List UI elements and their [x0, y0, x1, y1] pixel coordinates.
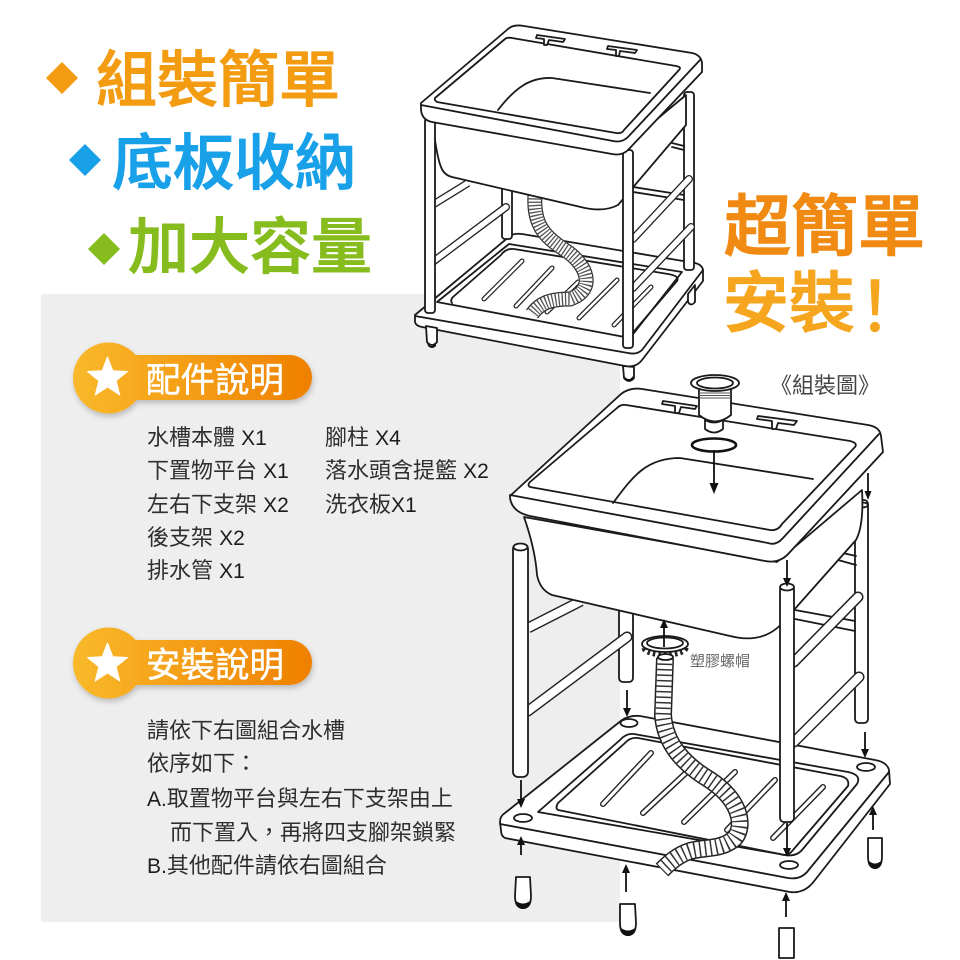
icon: star [88, 357, 128, 395]
installation instructions [147, 718, 456, 878]
gray background panel [41, 294, 620, 922]
icon: star [88, 643, 128, 681]
parts list: 排水管 X1 [147, 558, 245, 583]
drain hose [662, 658, 740, 870]
illustration: assembled sink [415, 25, 703, 382]
plastic nut [642, 636, 688, 660]
platform [415, 234, 703, 366]
slogan: super easy install: 超簡單 [724, 190, 925, 265]
rubber ring [692, 438, 736, 452]
back legs and rails [502, 180, 512, 239]
parts list [147, 425, 489, 583]
parts list: 左右下支架 X2 [147, 492, 289, 517]
front right leg [780, 585, 794, 822]
heading: larger capacity: 加大容量 [128, 213, 372, 281]
parts list: 洗衣板X1 [325, 492, 417, 517]
parts list: 水槽本體 X1 [147, 425, 267, 450]
back rails [795, 552, 856, 631]
installation instructions: B.其他配件請依右圖組合 [147, 853, 387, 878]
basin body [524, 490, 862, 638]
installation instructions: 請依下右圖組合水槽 [147, 718, 345, 743]
icon: green diamond [88, 233, 120, 265]
installation instructions: A.取置物平台與左右下支架由上 [147, 786, 453, 811]
label: plastic nut: 塑膠螺帽 [690, 653, 750, 670]
platform [500, 716, 890, 892]
badge title: 配件說明 [146, 362, 284, 400]
parts list: 腳柱 X4 [325, 425, 401, 450]
heading: base storage: 底板收納 [112, 129, 356, 197]
feet [426, 326, 437, 345]
parts list: 下置物平台 X1 [147, 458, 289, 483]
badge: installation description [73, 628, 312, 698]
installation instructions: 依序如下： [147, 751, 257, 776]
holes [514, 719, 875, 869]
side rails [434, 179, 691, 288]
feet [515, 838, 882, 958]
heading: easy assembly: 組裝簡單 [96, 46, 340, 114]
front legs [425, 118, 435, 313]
slogan: super easy install [723, 190, 925, 346]
icon: orange diamond [46, 62, 78, 94]
parts list: 後支架 X2 [147, 525, 245, 550]
back legs [619, 600, 633, 682]
basin body [431, 95, 686, 209]
slogan: super easy install: ！ [841, 270, 909, 346]
caption: assembly diagram: 《組裝圖》 [770, 373, 880, 398]
slots [484, 261, 651, 325]
rim [510, 389, 883, 562]
faucet holders [662, 401, 697, 413]
arrows [517, 450, 877, 917]
installation instructions: 而下置入，再將四支腳架鎖緊 [170, 820, 456, 845]
parts list: 落水頭含提籃 X2 [325, 458, 489, 483]
slogan: super easy install: 安裝 [723, 266, 855, 340]
feature list headings [46, 46, 372, 281]
rim [421, 25, 702, 154]
badge: parts description [73, 342, 312, 414]
icon: blue diamond [69, 144, 101, 176]
illustration: exploded assembly diagram [500, 375, 890, 958]
slots [603, 753, 823, 838]
front left leg [513, 544, 528, 777]
faucet holders [536, 35, 565, 45]
drain strainer [691, 375, 739, 432]
drain hose [532, 195, 586, 314]
side rails [528, 597, 859, 742]
badge title: 安裝說明 [146, 647, 284, 685]
